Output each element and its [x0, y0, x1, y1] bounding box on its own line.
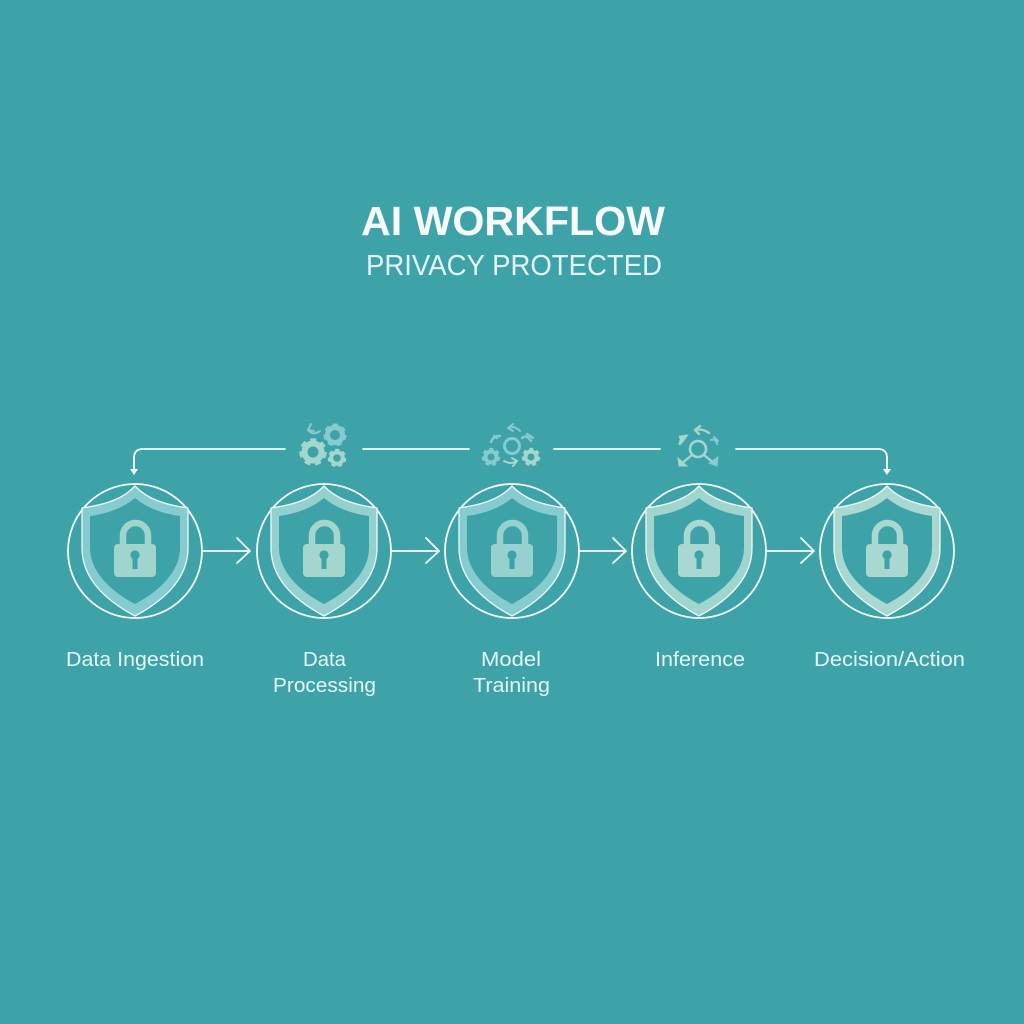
top connector: segment between gears and cycle [363, 448, 469, 450]
label: Inference: Inference [655, 648, 745, 671]
step 5: shield icon in circle [820, 484, 954, 618]
arrow: step 3 to 4 [579, 538, 626, 563]
step 1: shield icon in circle [68, 484, 202, 618]
arrow: step 4 to 5 [766, 538, 814, 563]
step 4: shield icon in circle [632, 484, 766, 618]
icon: gears [301, 424, 345, 466]
label: Model Training: Model [481, 648, 541, 671]
subtitle: PRIVACY PROTECTED [366, 250, 662, 282]
label: Data Ingestion: Data Ingestion [66, 648, 204, 671]
title: AI WORKFLOW [361, 198, 665, 244]
label: Model Training [473, 648, 550, 697]
top connector: left branch with down arrow [130, 449, 285, 475]
step 2: shield icon in circle [257, 484, 391, 618]
top connector: segment between cycle and inference icon [554, 448, 660, 450]
step 3: shield icon in circle [445, 484, 579, 618]
icon: inference network [678, 426, 718, 466]
label: Model Training: Training [473, 674, 550, 697]
arrow: step 2 to 3 [392, 538, 439, 563]
label: Data Processing: Data [303, 648, 347, 671]
label: Data Processing: Processing [273, 674, 376, 697]
label: Data Processing [273, 648, 376, 697]
label: Decision/Action: Decision/Action [814, 648, 965, 671]
top connector: right branch with down arrow [736, 449, 891, 475]
arrow: step 1 to 2 [203, 538, 250, 563]
icon: training cycle [483, 424, 539, 466]
